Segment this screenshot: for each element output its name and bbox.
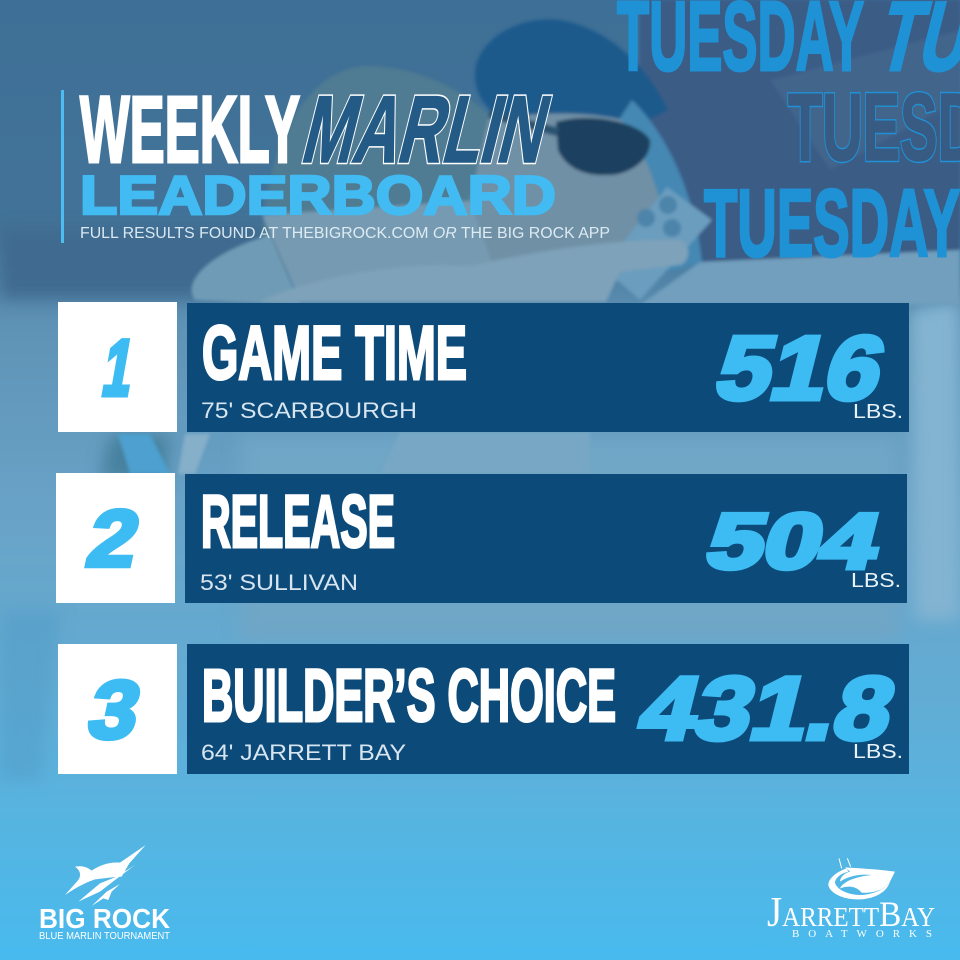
weight: 516 xyxy=(707,318,895,419)
sleeve left xyxy=(192,235,300,305)
panel 3 xyxy=(187,644,909,774)
top right backdrop xyxy=(640,0,960,262)
rank square 1 xyxy=(58,302,177,432)
hand and arm xyxy=(260,240,688,302)
phone xyxy=(603,187,712,300)
weight: 504 xyxy=(699,497,890,585)
logo: big rock xyxy=(39,845,171,942)
sunglasses xyxy=(556,118,650,175)
boat model: 53' SULLIVAN xyxy=(200,570,358,595)
subtitle: FULL RESULTS FOUND AT THEBIGROCK.COM OR THE BIG ROCK APP xyxy=(80,225,610,242)
logo: jarrett bay xyxy=(767,858,935,940)
heading: weekly: WEEKLY xyxy=(80,77,300,183)
row 1: game time xyxy=(58,302,909,432)
rank square 3 xyxy=(58,644,177,774)
wordmark: BIG ROCK xyxy=(39,903,170,934)
boat name: GAME TIME xyxy=(202,311,467,396)
unit: LBS. xyxy=(851,570,901,592)
boat name: BUILDER’S CHOICE xyxy=(202,654,616,737)
boat model: 64' JARRETT BAY xyxy=(201,740,406,765)
heading: marlin outline: MARLIN xyxy=(294,77,560,183)
cap brim xyxy=(620,100,702,272)
rank square 2 xyxy=(56,473,175,603)
lower folds xyxy=(380,432,590,474)
boat model: 75' SCARBOURGH xyxy=(201,398,417,423)
heading: marlin outline xyxy=(294,77,560,183)
tuesday decorative word stack xyxy=(617,0,960,277)
weight: 431.8 xyxy=(630,659,905,759)
rank number 1: 1 xyxy=(97,324,141,412)
panel 1 xyxy=(187,303,909,432)
unit: LBS. xyxy=(853,741,903,763)
hair xyxy=(262,200,510,300)
row 3: builder's choice xyxy=(58,644,909,774)
title block xyxy=(61,77,610,243)
tagline: BLUE MARLIN TOURNAMENT xyxy=(39,930,171,942)
boat name: RELEASE xyxy=(201,480,395,563)
wordmark: JARRETTBAY xyxy=(767,890,935,936)
rank number 2: 2 xyxy=(80,495,147,584)
unit: LBS. xyxy=(853,401,903,423)
heading: leaderboard: LEADERBOARD xyxy=(80,164,556,226)
cap dome xyxy=(475,19,668,125)
shirt right xyxy=(640,250,960,305)
title accent bar xyxy=(61,90,64,243)
rank number 3: 3 xyxy=(81,664,149,756)
sub wordmark: BOATWORKS xyxy=(792,928,932,940)
row 2: release xyxy=(56,473,907,603)
icon: boat xyxy=(828,858,895,899)
panel 2 xyxy=(185,474,907,603)
icon: marlin xyxy=(65,845,146,906)
heading: marlin outline: MARLIN xyxy=(294,77,560,183)
hat left xyxy=(262,66,505,270)
face xyxy=(470,110,660,285)
